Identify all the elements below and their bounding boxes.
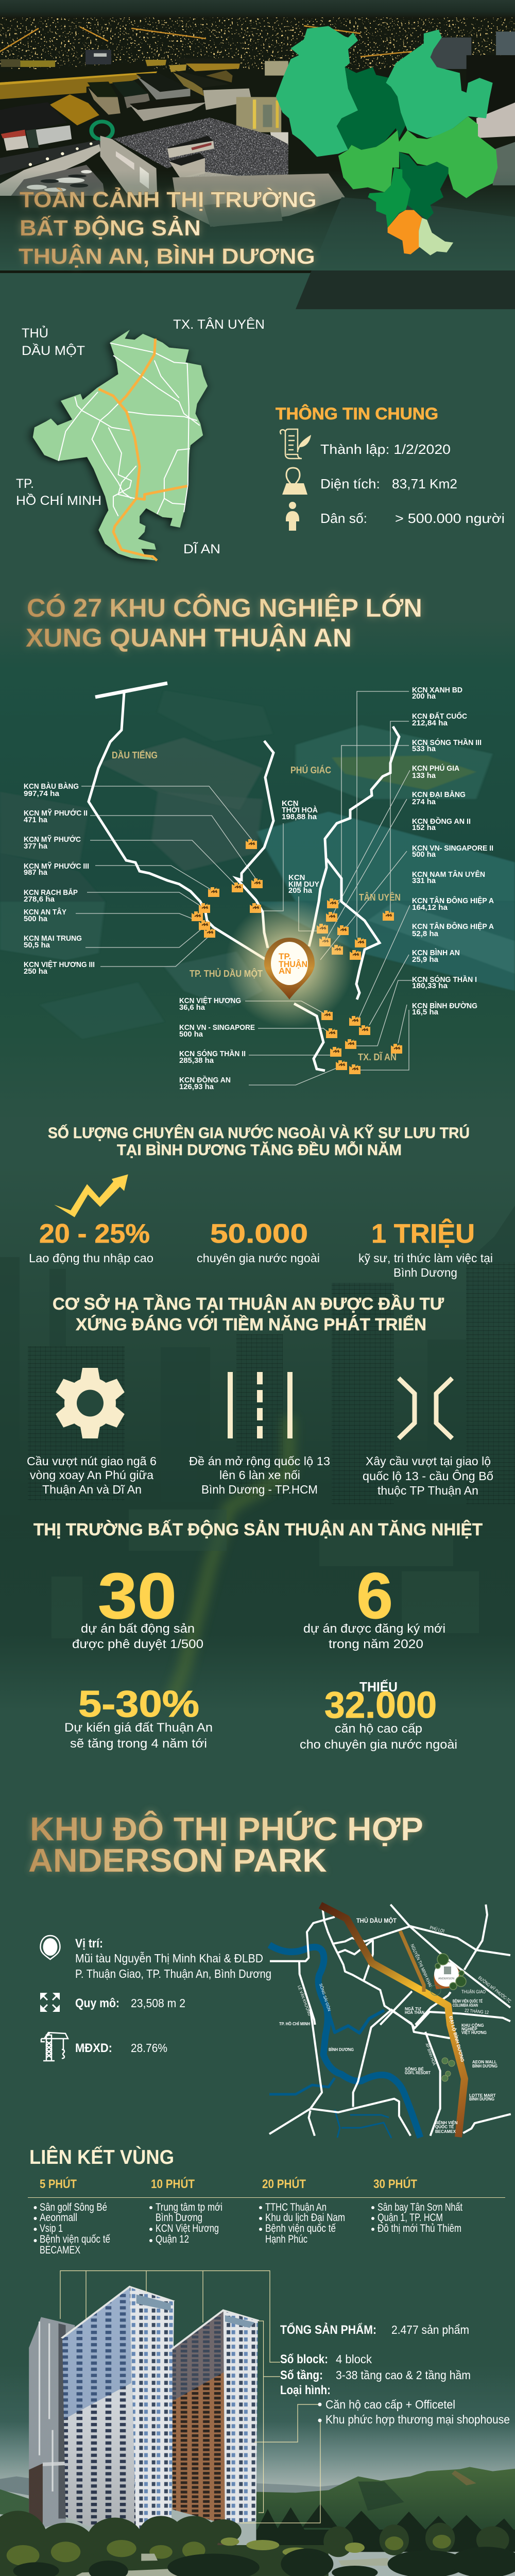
icon: road	[228, 1372, 293, 1438]
panel: bottom photo with towers and mountains	[0, 2286, 515, 2576]
labels: right column parks: KCN SÓNG THẦN I	[412, 975, 477, 984]
map labels: ẤP BÌNH HOÀ	[424, 2042, 437, 2066]
labels: centre parks: 36,6 ha	[179, 1003, 205, 1012]
stat: land price rise	[64, 1684, 213, 1751]
text: project facts: 2.477 sản phẩm	[391, 2323, 469, 2336]
stat: land price rise: sẽ tăng trong 4 năm tới	[70, 1737, 207, 1751]
column: 30 minutes: Đô thị mới Thủ Thiêm	[377, 2222, 461, 2234]
map labels: NGUYỄN THỊ MINH KHAI	[409, 1943, 434, 1988]
marker: Thuan An pin: AN	[279, 966, 291, 976]
main orange highways	[98, 338, 187, 561]
labels: right column parks: KCN SÓNG THẦN III	[412, 738, 482, 747]
labels: district names: TP. THỦ DẦU MỘT	[190, 968, 263, 979]
heading: market heating: THỊ TRƯỜNG BẤT ĐỘNG SẢN THUẬN AN TĂNG NHIỆT	[33, 1519, 483, 1539]
marker: Thuan An pin	[225, 899, 354, 1028]
text: area	[320, 476, 457, 492]
labels: left column parks: 500 ha	[24, 914, 48, 923]
text: project facts: Số block:	[280, 2352, 328, 2366]
stat: land price rise: Dự kiến giá đất Thuận An	[64, 1721, 213, 1735]
stat: 30 projects: được phê duyệt 1/500	[72, 1637, 203, 1651]
stat: engineers: 1 TRIỆU	[371, 1218, 475, 1249]
column: 5 minutes: Bệnh viện quốc tế	[40, 2233, 110, 2245]
title: THUẬN AN, BÌNH DƯƠNG	[19, 244, 315, 269]
mountains	[0, 2467, 515, 2545]
district: Thuan An highlighted	[388, 210, 422, 255]
labels: right column parks: 274 ha	[412, 798, 436, 806]
heading: infrastructure: CƠ SỞ HẠ TẦNG TẠI THUẬN AN ĐƯỢC ĐẦU TƯ	[53, 1294, 444, 1313]
labels: right column parks: 180,33 ha	[412, 981, 448, 990]
labels: right column parks: 212,84 ha	[412, 719, 448, 727]
text: overpass: quốc lộ 13 - cầu Ông Bố	[363, 1469, 493, 1483]
stat: apartment shortage: 32.000	[324, 1685, 437, 1726]
map labels: COLUMBIA ASIAN	[453, 2003, 478, 2008]
map labels: THỦ DẦU MỘT	[356, 1917, 397, 1924]
stat: land price rise: 5-30%	[78, 1684, 199, 1725]
district: Ben Cat	[337, 67, 410, 150]
column: 30 minutes: 30 PHÚT	[373, 2177, 417, 2191]
labels: right column parks: 331 ha	[412, 876, 436, 885]
icon: gear	[55, 1368, 126, 1438]
icon: location pin	[40, 1936, 60, 1959]
leader lines	[76, 691, 412, 1085]
map labels: neighbours: THỦ	[22, 325, 48, 341]
stat: apartment shortage: căn hộ cao cấp	[335, 1722, 422, 1736]
map labels: LÊ VĂN KHƯƠNG	[297, 1985, 312, 2016]
panel: hero aerial photo	[0, 0, 515, 309]
icon: scroll and quill	[280, 429, 311, 459]
labels: centre parks: KCN	[282, 799, 299, 808]
labels: left column parks: KCN AN TÂY	[24, 907, 66, 917]
stat: high income labour: 20 - 25%	[39, 1219, 150, 1249]
text: location	[75, 1937, 271, 1980]
labels: district names: TX. DĨ AN	[358, 1052, 397, 1062]
tower: right	[172, 2310, 259, 2524]
text: population: Dân số:	[320, 511, 367, 526]
map labels: ĐẠI LỘ BÌNH DƯƠNG	[448, 2015, 466, 2062]
labels: right column parks: 500 ha	[412, 850, 436, 859]
map labels: LOTTE MART	[469, 2093, 496, 2098]
text: location: Mũi tàu Nguyễn Thị Minh Khai & ĐLBD	[75, 1952, 263, 1965]
icon: crane	[41, 2032, 68, 2061]
district: Thu Dau Mot	[368, 167, 410, 228]
icon: map pin	[282, 468, 307, 495]
icon: overpass bridge	[399, 1378, 452, 1438]
labels: centre parks: 285,38 ha	[179, 1056, 214, 1065]
labels: left column parks: 987 ha	[24, 868, 48, 877]
heading: general information: THÔNG TIN CHUNG	[276, 404, 438, 423]
text: national road 13	[189, 1454, 330, 1496]
heading: regional links: LIÊN KẾT VÙNG	[29, 2146, 174, 2168]
stat: 6 new projects	[303, 1560, 445, 1651]
labels: right column parks: 133 ha	[412, 771, 436, 780]
text: project facts: TỔNG SẢN PHẨM:	[280, 2322, 376, 2337]
labels: centre parks: 198,88 ha	[282, 812, 317, 821]
text: area: 83,71 Km2	[392, 476, 457, 492]
map labels: neighbours: DẦU MỘT	[22, 343, 85, 358]
labels: right column parks: 25,9 ha	[412, 955, 439, 964]
labels: district names: PHÚ GIÁC	[290, 765, 331, 775]
stat: foreign experts: chuyên gia nước ngoài	[197, 1251, 320, 1265]
text: project facts: Căn hộ cao cấp + Officetel	[325, 2398, 455, 2411]
labels: district names	[112, 750, 401, 1062]
text: interchange: Thuận An và Dĩ An	[42, 1483, 142, 1496]
text: founding date: Thành lập: 1/2/2020	[320, 442, 451, 457]
text: population	[320, 511, 505, 526]
heading: Anderson Park: KHU ĐÔ THỊ PHỨC HỢP	[30, 1810, 423, 1848]
marker: Anderson site: ANDERSON	[438, 1977, 454, 1980]
labels: right column parks	[412, 686, 494, 1016]
labels: centre parks: KCN VN - SINGAPORE	[179, 1023, 255, 1032]
text: project facts: Số tầng:	[280, 2368, 323, 2382]
map labels: BỆNH VIỆN	[435, 2121, 458, 2125]
stat: high income labour: Lao động thu nhập cao	[29, 1251, 153, 1265]
stat: engineers: kỹ sư, tri thức làm việc tại	[358, 1251, 493, 1265]
foreground trees	[13, 2547, 515, 2576]
labels: left column parks	[24, 782, 95, 976]
labels: centre parks: 126,93 ha	[179, 1082, 214, 1091]
heading: 27 industrial parks	[26, 593, 422, 652]
stat: 30 projects	[72, 1560, 203, 1651]
map labels: neighbours: HỒ CHÍ MINH	[16, 493, 101, 508]
stat: 6 new projects: trong năm 2020	[329, 1637, 423, 1651]
map labels: NGHIỆP	[461, 2027, 477, 2031]
text: scale: 23,508 m 2	[131, 1996, 185, 2010]
map labels: neighbours	[16, 317, 265, 556]
district: Di An	[419, 218, 453, 256]
map labels: 22 THÁNG 12	[465, 2008, 489, 2015]
map labels: BÌNH DƯƠNG	[469, 2097, 494, 2102]
labels: centre parks	[179, 799, 319, 1091]
roads: north part	[270, 1905, 510, 2025]
heading: foreign experts: TẠI BÌNH DƯƠNG TĂNG ĐỀU MỖI NĂM	[117, 1141, 402, 1159]
road: Binh Duong boulevard	[320, 1905, 465, 2137]
stat: apartment shortage	[300, 1679, 457, 1752]
text: location: P. Thuận Giao, TP. Thuận An, Bình Dương	[75, 1967, 271, 1980]
text: density: 28.76%	[131, 2041, 167, 2055]
river: Saigon	[269, 1945, 420, 2138]
marker: Anderson site	[431, 1954, 466, 1995]
stat: 30 projects: dự án bất động sản	[81, 1622, 195, 1636]
labels: right column parks: 533 ha	[412, 744, 436, 753]
heading: foreign experts	[48, 1124, 470, 1159]
column: 5 minutes	[34, 2177, 110, 2256]
text: project facts: 4 block	[336, 2352, 372, 2366]
map labels: AEON MALL	[472, 2060, 497, 2064]
map labels: neighbours: DĨ AN	[183, 541, 220, 556]
district: Dau Tieng	[276, 26, 358, 157]
labels: right column parks: KCN PHÚ GIA	[412, 764, 459, 773]
icon: rising arrow	[54, 1174, 128, 1217]
text: interchange	[27, 1454, 157, 1496]
map labels: VIỆT HƯƠNG	[461, 2030, 487, 2035]
trees: golf resort	[442, 2058, 455, 2081]
text: population: > 500.000 người	[395, 511, 505, 526]
text: project facts	[280, 2322, 510, 2426]
map labels: BỆNH VIỆN QUỐC TẾ	[453, 1998, 483, 2004]
map: Binh Duong province districts	[276, 26, 497, 256]
map labels: THUẬN GIAO	[461, 1989, 486, 1994]
text: national road 13: lên 6 làn xe nối	[219, 1468, 300, 1482]
labels: right column parks: KCN TÂN ĐÔNG HIỆP A	[412, 896, 494, 905]
map labels: BÌNH DƯƠNG	[472, 2064, 497, 2069]
heading: infrastructure	[53, 1294, 444, 1334]
labels: left column parks: KCN MAI TRUNG	[24, 934, 82, 943]
text: density	[75, 2041, 167, 2055]
minor roads	[59, 343, 200, 516]
text: national road 13: Bình Dương - TP.HCM	[201, 1483, 318, 1496]
text: interchange: Cầu vượt nút giao ngã 6	[27, 1454, 157, 1468]
text: project facts: Loại hình:	[280, 2383, 331, 2397]
text: overpass	[363, 1454, 493, 1497]
stat: 6 new projects: 6	[356, 1560, 393, 1632]
panel: industrial parks photo background	[0, 618, 515, 1123]
map labels: HOÀ THẦN	[405, 2010, 424, 2015]
labels: right column parks: KCN TÂN ĐÔNG HIỆP A	[412, 922, 494, 931]
stat: engineers: Bình Dương	[393, 1266, 457, 1279]
map: Thuan An city	[33, 330, 208, 561]
map labels: KHU CÔNG	[461, 2023, 484, 2028]
labels: left column parks: 50,5 ha	[24, 941, 50, 950]
panel: city skyline background	[0, 1164, 515, 1710]
map labels: TP. HỒ CHÍ MINH	[279, 2021, 310, 2026]
text: density: MĐXD:	[75, 2041, 112, 2055]
labels: centre parks: KCN	[288, 873, 305, 882]
column: 30 minutes: Sân bay Tân Sơn Nhất	[377, 2201, 462, 2213]
text: overpass: Xây cầu vượt tại giao lộ	[366, 1454, 491, 1468]
icon: person	[286, 502, 299, 531]
column: 10 minutes: Quận 12	[156, 2233, 189, 2245]
city outline	[33, 330, 208, 561]
map labels: SÔNG SÀI GÒN	[318, 1983, 332, 2012]
labels: centre parks: KCN SÓNG THẦN II	[179, 1049, 246, 1058]
column: 20 minutes: TTHC Thuận An	[265, 2201, 327, 2213]
stat: apartment shortage: THIẾU	[359, 1679, 398, 1694]
stat: high income labour	[29, 1219, 153, 1265]
text: area: Diện tích:	[320, 476, 380, 492]
stat: engineers	[358, 1218, 493, 1279]
labels: right column parks: KCN VN- SINGAPORE II	[412, 844, 493, 853]
stat: foreign experts	[197, 1219, 320, 1265]
tower: centre	[62, 2286, 174, 2546]
column: 10 minutes: Trung tâm tp mới	[156, 2201, 222, 2213]
labels: left column parks: 997,74 ha	[24, 789, 60, 798]
text: location: Vị trí:	[75, 1937, 103, 1951]
labels: centre parks: KCN VIỆT HƯƠNG	[179, 996, 241, 1005]
district: Tan Uyen	[399, 152, 449, 220]
column: 10 minutes: KCN Việt Hương	[156, 2222, 219, 2234]
labels: centre parks: THỚI HOÀ	[282, 805, 318, 815]
map labels: NGÃ TƯ	[405, 2007, 421, 2011]
column: 20 minutes: 20 PHÚT	[262, 2177, 306, 2191]
labels: right column parks: KCN XANH BD	[412, 686, 462, 694]
column: 30 minutes	[371, 2177, 462, 2234]
column: 5 minutes: Sân golf Sông Bé	[40, 2201, 107, 2213]
text: national road 13: Đề án mở rộng quốc lộ 13	[189, 1454, 330, 1468]
text: project facts: 3-38 tầng cao & 2 tầng hầm	[336, 2368, 471, 2382]
heading: foreign experts: SỐ LƯỢNG CHUYÊN GIA NƯỚC NGOÀI VÀ KỸ SƯ LƯU TRÚ	[48, 1124, 470, 1142]
map labels: SÔNG BÉ	[405, 2067, 424, 2072]
title: BẤT ĐỘNG SẢN	[20, 215, 201, 241]
labels: right column parks: 152 ha	[412, 823, 436, 832]
map labels	[279, 1917, 512, 2134]
column: 30 minutes: Quận 1, TP. HCM	[377, 2211, 443, 2224]
labels: district names: DẦU TIẾNG	[112, 750, 158, 760]
roads: south part	[269, 2009, 511, 2136]
district: Bac Tan Uyen	[398, 116, 497, 198]
marker: Thuan An pin: THUẬN	[279, 959, 307, 969]
labels: right column parks: KCN ĐẤT CUỐC	[412, 711, 467, 721]
main roads on industrial map	[89, 683, 399, 1071]
column: 10 minutes: 10 PHÚT	[151, 2177, 195, 2191]
map labels: neighbours: TP.	[16, 477, 34, 491]
column: 10 minutes	[149, 2177, 222, 2245]
podium	[138, 2531, 236, 2549]
stat: 30 projects: 30	[98, 1560, 177, 1632]
text: scale	[75, 1996, 185, 2010]
labels: centre parks: KIM DUY	[288, 880, 319, 889]
column: 5 minutes: Vsip 1	[40, 2222, 63, 2234]
building leader lines	[60, 2271, 320, 2523]
trees	[0, 2511, 509, 2576]
labels: right column parks: KCN ĐỒNG AN II	[412, 817, 471, 826]
labels: right column parks: 200 ha	[412, 692, 436, 701]
labels: left column parks: 278,6 ha	[24, 895, 55, 904]
conifers	[256, 2504, 515, 2552]
map labels: neighbours: TX. TÂN UYÊN	[173, 317, 265, 332]
labels: left column parks: KCN RẠCH BẮP	[24, 888, 78, 897]
labels: right column parks: KCN NAM TÂN UYÊN	[412, 870, 485, 879]
labels: right column parks: KCN BÌNH AN	[412, 948, 460, 957]
heading: infrastructure: XỨNG ĐÁNG VỚI TIỀM NĂNG PHÁT TRIỂN	[76, 1315, 426, 1334]
stat: apartment shortage: cho chuyên gia nước ngoài	[300, 1738, 457, 1752]
marker: Thuan An pin: TP.	[279, 952, 291, 961]
stat: 6 new projects: dự án được đăng ký mới	[303, 1622, 445, 1636]
labels: right column parks: 16,5 ha	[412, 1008, 439, 1016]
column: 20 minutes: Khu du lịch Đại Nam	[265, 2211, 345, 2224]
heading: 27 industrial parks: XUNG QUANH THUẬN AN	[26, 623, 352, 652]
district: Phu Giao	[386, 29, 493, 138]
heading: 27 industrial parks: CÓ 27 KHU CÔNG NGHIỆP LỚN	[27, 593, 422, 622]
labels: left column parks: 471 ha	[24, 816, 48, 824]
location map	[269, 1905, 512, 2138]
labels: left column parks: KCN VIỆT HƯƠNG III	[24, 960, 95, 969]
icon: expand arrows	[40, 1993, 60, 2012]
map labels: BÌNH DƯƠNG	[329, 2047, 354, 2052]
stat: foreign experts: 50.000	[210, 1219, 308, 1249]
labels: centre parks: 500 ha	[179, 1030, 203, 1039]
column: 10 minutes: Bình Dương	[156, 2211, 202, 2224]
icons: factories	[192, 839, 402, 1074]
road: Nguyen Thi Minh Khai	[400, 1931, 424, 1992]
text: scale: Quy mô:	[75, 1996, 119, 2010]
text: overpass: thuộc TP Thuận An	[377, 1484, 478, 1497]
text: interchange: vòng xoay An Phú giữa	[30, 1468, 153, 1482]
labels: left column parks: KCN MỸ PHƯỚC III	[24, 861, 89, 871]
map labels: BECAMEX	[435, 2129, 456, 2134]
labels: right column parks: KCN BÌNH ĐƯỜNG	[412, 1001, 477, 1010]
labels: centre parks: KCN ĐỒNG AN	[179, 1075, 231, 1084]
district: Bau Bang	[338, 130, 399, 192]
column: 5 minutes: 5 PHÚT	[40, 2177, 77, 2191]
labels: left column parks: KCN BÀU BÀNG	[24, 782, 79, 791]
tower: far left	[29, 2317, 75, 2528]
title: TOÀN CẢNH THỊ TRƯỜNG	[20, 187, 317, 212]
labels: left column parks: KCN MỸ PHƯỚC II	[24, 808, 88, 818]
map labels: PHÚ LỢI	[429, 1925, 445, 1934]
column: 20 minutes	[259, 2177, 345, 2245]
heading: Anderson Park	[28, 1810, 423, 1879]
labels: centre parks: 205 ha	[288, 886, 313, 895]
labels: left column parks: KCN MỸ PHƯỚC	[24, 835, 81, 844]
labels: district names: TÂN UYÊN	[359, 892, 401, 903]
labels: left column parks: 377 ha	[24, 842, 48, 851]
map labels: QUỐC TẾ	[435, 2124, 454, 2129]
heading: Anderson Park: ANDERSON PARK	[28, 1842, 327, 1879]
title	[19, 187, 317, 269]
labels: right column parks: KCN ĐẠI BẰNG	[412, 790, 466, 799]
labels: right column parks: 164,12 ha	[412, 903, 448, 912]
labels: right column parks: 52,8 ha	[412, 929, 439, 938]
labels: left column parks: 250 ha	[24, 967, 48, 976]
column: 5 minutes: Aeonmall	[40, 2211, 77, 2224]
map labels: GOFL RESORT	[405, 2071, 431, 2075]
column: 20 minutes: Bệnh viện quốc tế	[265, 2222, 336, 2234]
column: 5 minutes: BECAMEX	[40, 2244, 80, 2256]
column: 20 minutes: Hạnh Phúc	[265, 2233, 307, 2245]
